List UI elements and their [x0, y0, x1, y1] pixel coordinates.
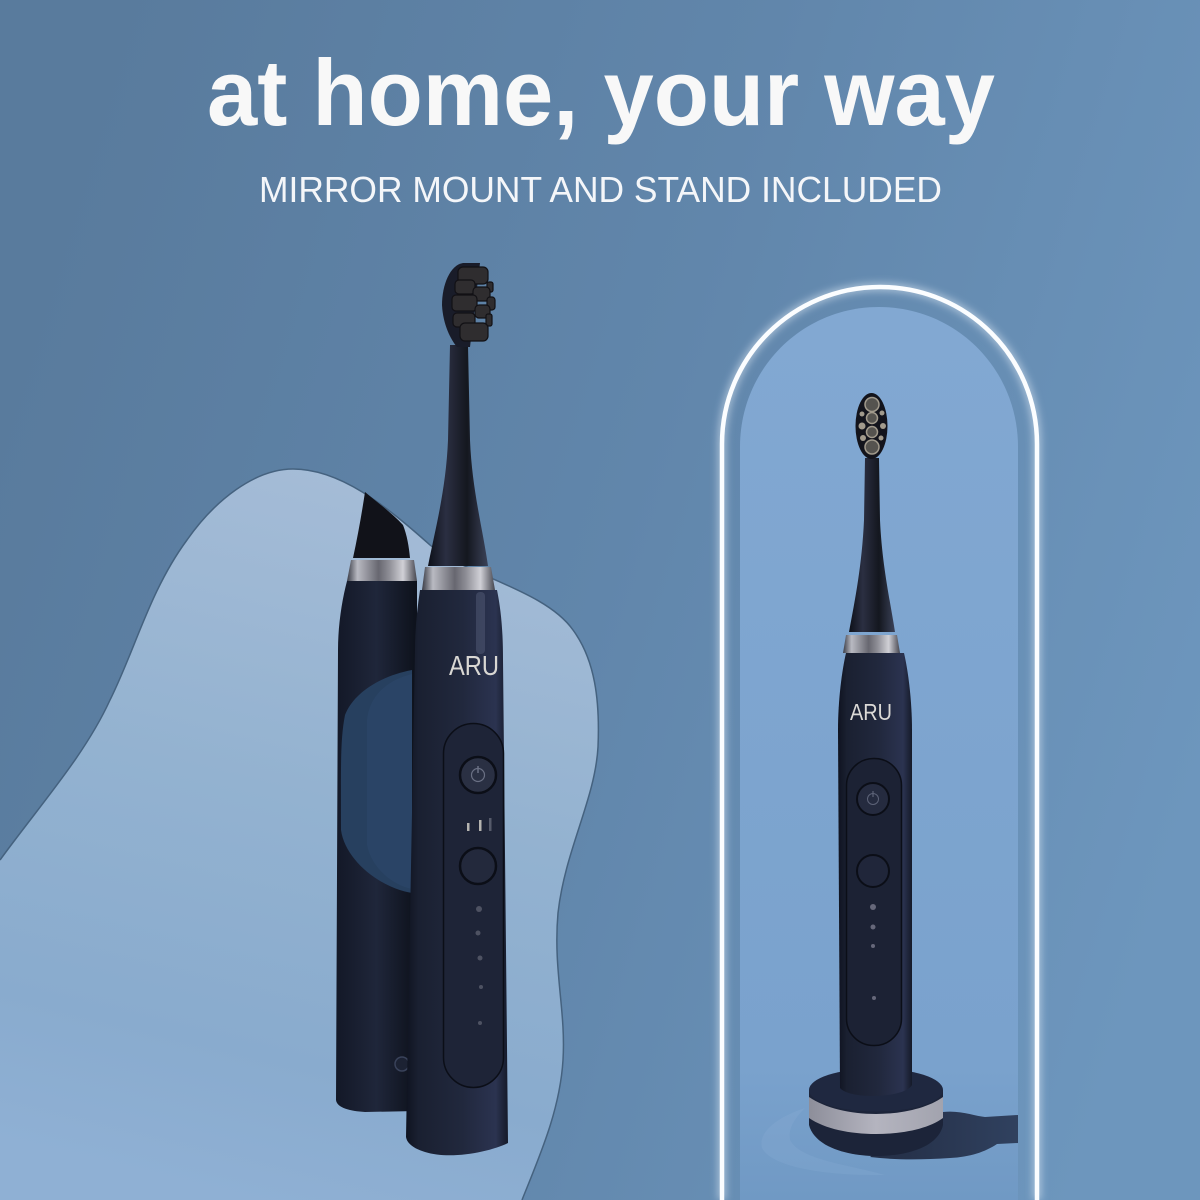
title: at home, your way	[207, 40, 995, 145]
stand control panel	[846, 758, 902, 1046]
stand	[809, 1068, 943, 1156]
stand logo: ARU	[850, 699, 892, 725]
stand mode icons	[870, 904, 876, 1000]
front handle	[406, 590, 508, 1155]
level indicators	[467, 818, 492, 831]
subtitle: MIRROR MOUNT AND STAND INCLUDED	[259, 169, 942, 210]
mirror mount	[341, 670, 412, 893]
stand silver band	[809, 1097, 943, 1134]
reflected handle	[336, 581, 417, 1112]
mode button	[460, 848, 496, 884]
mirror edge	[0, 469, 598, 1200]
stand top	[809, 1068, 943, 1112]
inner panel	[740, 307, 1018, 1200]
arch outline	[722, 287, 1037, 1200]
mode icons	[476, 906, 483, 1025]
mirror surface	[0, 469, 598, 1200]
stand toothbrush	[838, 393, 912, 1096]
arch outline and inner panel	[722, 287, 1037, 1200]
floor ring	[761, 1108, 885, 1175]
stand head	[856, 393, 888, 459]
mirror	[0, 469, 598, 1200]
brush head	[442, 263, 480, 347]
stand neck	[849, 458, 895, 632]
front collar	[422, 567, 495, 590]
stand collar	[843, 635, 900, 653]
stand power button	[857, 783, 889, 815]
control panel	[444, 724, 504, 1088]
reflected toothbrush and mirror mount	[336, 492, 417, 1112]
stand bristles	[865, 398, 879, 454]
highlight	[476, 592, 485, 654]
mount inner face	[367, 674, 412, 889]
arch glow	[722, 287, 1037, 1200]
reflected tip	[353, 492, 410, 558]
stand shadow	[870, 1112, 1018, 1159]
front toothbrush	[406, 263, 508, 1155]
stand handle	[838, 653, 912, 1096]
bristles	[452, 267, 495, 341]
brush neck	[428, 345, 488, 566]
screw	[395, 1057, 409, 1071]
stand mode button	[857, 855, 889, 887]
reflected collar	[347, 560, 417, 581]
logo: ARU	[449, 650, 499, 681]
stand lower	[809, 1090, 943, 1156]
power button	[460, 757, 496, 793]
stand side bristles	[858, 410, 886, 441]
